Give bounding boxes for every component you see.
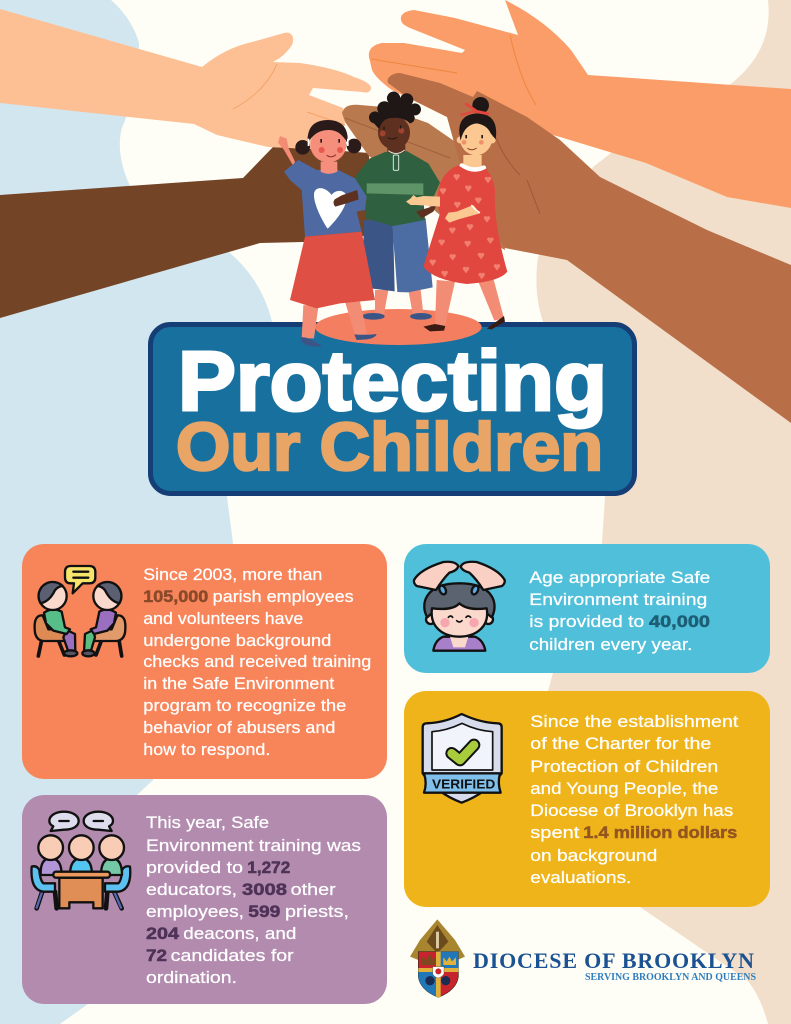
text: spending: of the Charter for the <box>530 734 711 753</box>
text: spending: and Young People, the <box>530 779 718 798</box>
icon: verified shield <box>423 714 502 803</box>
panel: spending on background evaluations <box>404 691 770 907</box>
text: spending: Protection of Children <box>530 757 718 776</box>
text: children's training: Age appropriate Safe <box>529 568 710 587</box>
text: training counts: 204 <box>146 924 180 943</box>
text: training counts: 72 <box>146 946 167 965</box>
panel: background checks <box>22 544 387 779</box>
hand: large brown hand <box>345 73 791 423</box>
hand: dark brown arm <box>0 147 372 318</box>
illustration: three children standing on platform <box>278 92 507 347</box>
text: spending <box>530 712 739 887</box>
hand: middle tan hand <box>342 105 505 250</box>
icon: two people talking <box>35 566 125 656</box>
text: training counts: 3008 <box>242 880 287 899</box>
hand: peach arm <box>0 9 371 150</box>
boy <box>353 92 440 320</box>
text: training counts: priests, <box>285 902 349 921</box>
title: Protecting: Protecting <box>178 334 607 428</box>
text: training counts: Environment training was <box>146 836 361 855</box>
platform <box>315 309 482 345</box>
text: children's training: 40,000 <box>649 612 710 631</box>
text: children's training: is provided to <box>529 612 644 631</box>
girl with heart shirt <box>278 120 377 347</box>
text: background checks: checks and received training <box>143 652 371 671</box>
panel: children's training <box>404 544 770 673</box>
text: background checks: behavior of abusers and <box>143 718 335 737</box>
icon: verified shield: VERIFIED <box>432 778 495 792</box>
text: training counts: ordination. <box>146 968 237 987</box>
text: background checks: parish employees <box>213 587 354 606</box>
text: training counts: candidates for <box>171 946 294 965</box>
text: training counts: This year, Safe <box>146 813 269 832</box>
text: tagline: SERVING BROOKLYN AND QUEENS <box>585 972 756 983</box>
text: spending: evaluations. <box>530 868 631 887</box>
title: Our Children: Our Children <box>176 409 603 485</box>
text: children's training <box>529 568 710 654</box>
text: spending: Diocese of Brooklyn has <box>530 801 733 820</box>
text: training counts: provided to <box>146 858 243 877</box>
logo: Diocese of Brooklyn <box>410 919 756 997</box>
text: children's training: children every year. <box>529 635 692 654</box>
text: training counts <box>146 813 361 987</box>
text: background checks: program to recognize the <box>143 696 346 715</box>
hand: orange arm <box>369 0 791 208</box>
text: spending: Since the establishment <box>530 712 739 731</box>
text: background checks: in the Safe Environment <box>143 674 335 693</box>
girl in red dress <box>406 97 507 331</box>
text: background checks: Since 2003, more than <box>143 565 322 584</box>
text: organisation name: DIOCESE OF BROOKLYN <box>473 948 754 973</box>
text: background checks: undergone background <box>143 631 331 650</box>
icon: hands over child's head <box>414 562 505 651</box>
icon: diocesan crest <box>410 919 465 997</box>
text: background checks: and volunteers have <box>143 609 303 628</box>
text: training counts: deacons, and <box>183 924 296 943</box>
text: background checks: 105,000 <box>143 587 208 606</box>
text: children's training: Environment training <box>529 590 707 609</box>
title banner <box>150 324 634 494</box>
text: training counts: employees, <box>146 902 244 921</box>
text: spending: spent <box>530 823 580 842</box>
text: training counts: other <box>291 880 336 899</box>
text: training counts: educators, <box>146 880 237 899</box>
text: spending: on background <box>530 846 657 865</box>
text: background checks <box>143 565 371 759</box>
text: training counts: 599 <box>248 902 280 921</box>
panel: training counts <box>22 795 387 1004</box>
text: spending: 1.4 million dollars <box>583 823 737 842</box>
text: background checks: how to respond. <box>143 740 270 759</box>
icon: group meeting at table <box>31 812 130 908</box>
text: training counts: 1,272 <box>247 858 290 877</box>
